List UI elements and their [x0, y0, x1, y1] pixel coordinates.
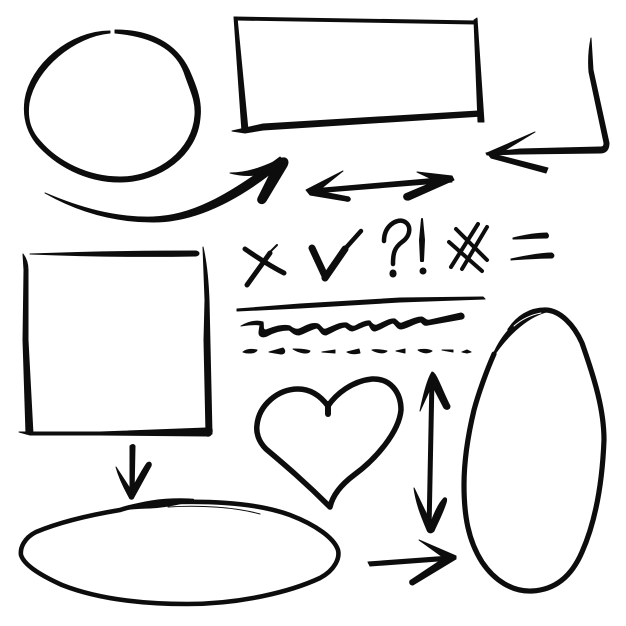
icon: cross mark [245, 245, 284, 285]
dashed underline [243, 348, 471, 354]
icon: right arrow [368, 540, 456, 585]
icon: question mark [384, 221, 409, 274]
icon: wide ellipse [21, 499, 338, 604]
wavy underline [241, 313, 464, 337]
icon: tall oval [464, 308, 604, 591]
icon: equals sign [511, 233, 554, 260]
icon: curved arrow [45, 157, 288, 222]
icon: heart [257, 379, 401, 507]
icon: vertical double arrow [414, 372, 450, 533]
icon: small down arrow [116, 444, 151, 499]
icon: hash scribble [449, 224, 487, 271]
icon: double-headed arrow [306, 171, 454, 201]
straight underline [237, 297, 485, 311]
icon: hand-drawn square [19, 247, 212, 436]
icon: check mark [312, 231, 361, 278]
icon: corner arrow pointing left [486, 38, 609, 173]
icon: hand-drawn circle [24, 30, 200, 182]
icon: exclamation mark [420, 219, 426, 274]
icon: hand-drawn rectangle top [232, 17, 484, 133]
